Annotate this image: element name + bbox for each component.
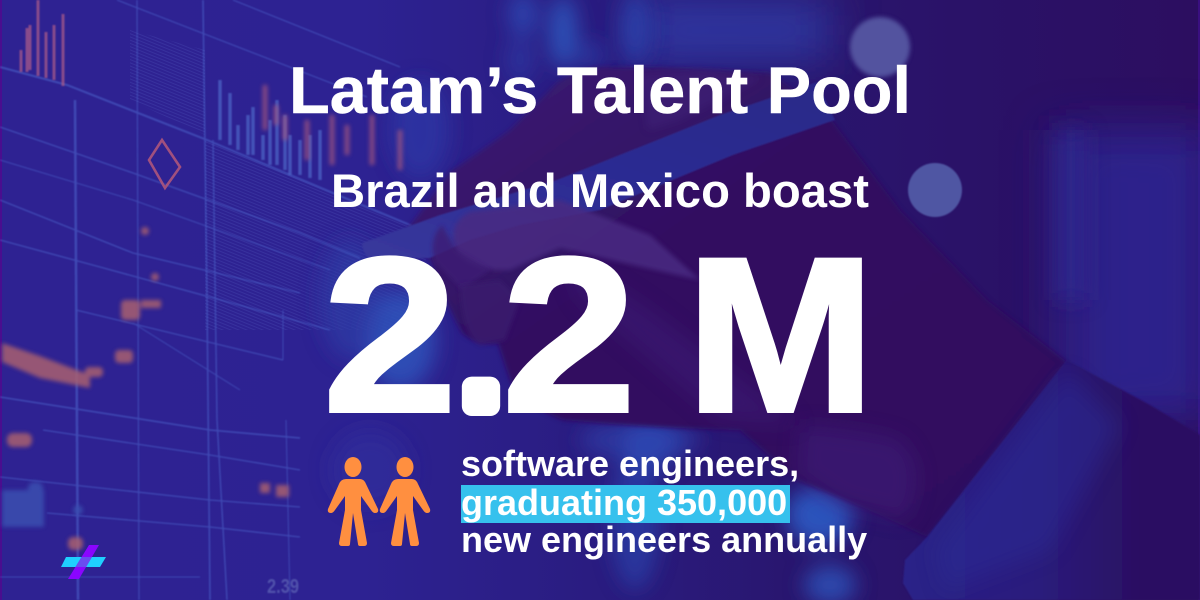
icon: person left bbox=[328, 457, 378, 546]
highlight bar bbox=[461, 485, 790, 523]
hatch texture on the screen bbox=[130, 30, 440, 330]
big number bbox=[323, 212, 875, 458]
forearm and hand silhouette bbox=[400, 67, 1067, 537]
wrist highlight bbox=[797, 425, 916, 520]
shirt cuff bbox=[903, 360, 1200, 600]
big number: 2 bbox=[502, 212, 636, 458]
title: Latam’s Talent Pool bbox=[289, 53, 911, 127]
subtitle: Brazil and Mexico boast bbox=[331, 164, 869, 217]
icon: two people bbox=[328, 457, 430, 546]
chart bars top-left bbox=[21, 0, 63, 86]
big number: . bbox=[463, 288, 499, 434]
body text: graduating 350,000 bbox=[461, 482, 787, 523]
icon: person right bbox=[380, 457, 430, 546]
red chart bars mid bbox=[265, 85, 400, 170]
orange blurred blocks bbox=[2, 227, 289, 550]
icon: logo cross bbox=[61, 545, 106, 579]
blue chart bars mid bbox=[220, 80, 320, 180]
upper finger bbox=[640, 70, 760, 130]
bokeh lights bbox=[850, 17, 910, 77]
body text: new engineers annually bbox=[461, 519, 867, 560]
body text: software engineers, bbox=[461, 443, 799, 484]
faded screen digits: 2.39 bbox=[267, 576, 299, 598]
screen grid lines bbox=[0, 0, 470, 600]
big number: M bbox=[686, 212, 875, 458]
stylus bbox=[362, 82, 835, 258]
big number: 2 bbox=[323, 212, 457, 458]
blue block chart bottom-left bbox=[2, 482, 83, 527]
body text bbox=[461, 443, 867, 560]
blue glow patches bbox=[640, 0, 1200, 430]
lit fingers gripping stylus bbox=[453, 200, 700, 280]
diamond marker bbox=[149, 140, 180, 188]
